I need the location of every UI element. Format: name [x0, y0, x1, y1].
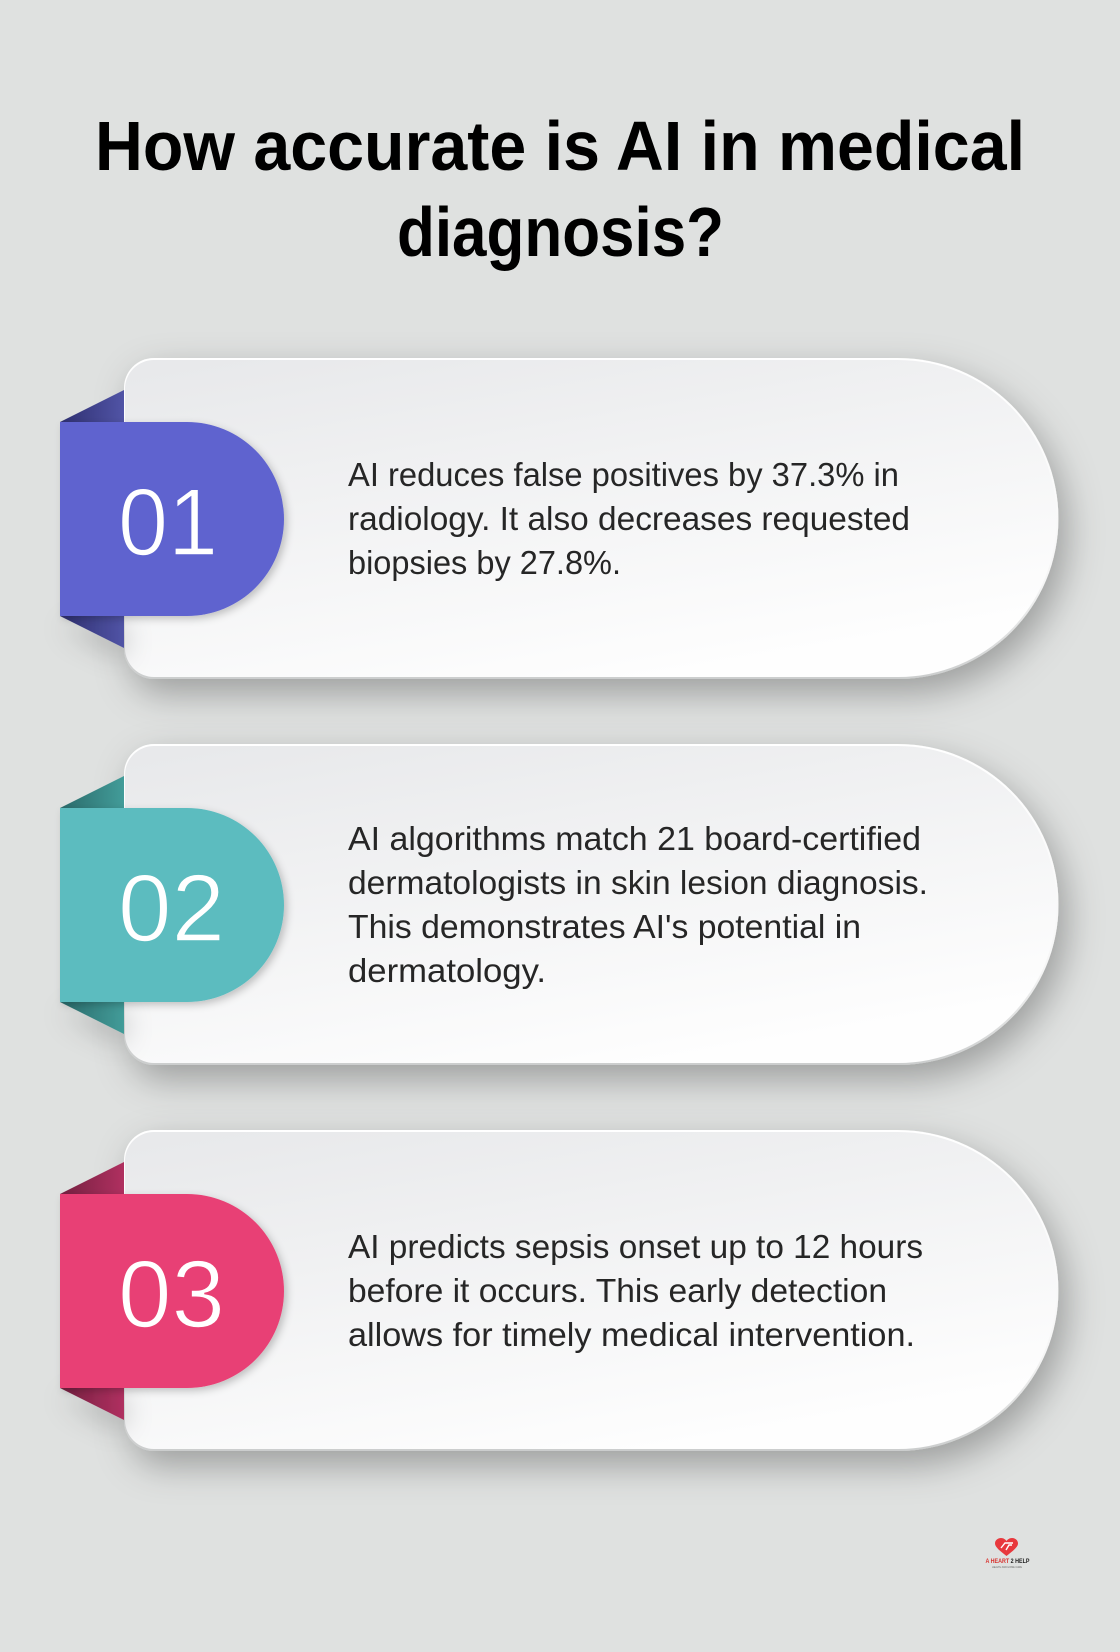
text: step 02: dermatology.	[348, 952, 546, 989]
text: step 03: before it occurs. This early detection	[348, 1272, 887, 1309]
title: diagnosis?	[397, 193, 724, 271]
ribbon fold: step 02 bottom	[60, 1002, 124, 1034]
ribbon fold: step 03 bottom	[60, 1388, 124, 1420]
ribbon fold: step 03 top	[60, 1162, 124, 1194]
text: step 02: AI algorithms match 21 board-certified	[348, 820, 921, 857]
card: step 03 face	[125, 1132, 1056, 1449]
title	[95, 107, 1025, 271]
text: step 03: AI predicts sepsis onset up to 12 hours	[348, 1228, 923, 1265]
text: step 02: This demonstrates AI's potential in	[348, 908, 861, 945]
badge: step 02	[60, 808, 284, 1002]
icon: hands in heart	[1001, 1543, 1013, 1550]
text: step 02: dermatologists in skin lesion diagnosis.	[348, 864, 928, 901]
title: How accurate is AI in medical	[95, 107, 1025, 185]
ribbon fold: step 01 bottom	[60, 616, 124, 648]
text: step 01: AI reduces false positives by 37.3% in	[348, 456, 899, 493]
number: 02: 02	[118, 855, 225, 962]
text: step 03: allows for timely medical intervention.	[348, 1316, 915, 1353]
badge: step 01	[60, 422, 284, 616]
text: step 01	[348, 456, 910, 581]
number: 03: 03	[118, 1241, 225, 1348]
logo tagline: HEALTH AND HOME CARE	[992, 1565, 1022, 1569]
card: step 01 face	[125, 360, 1056, 677]
panel: step 01	[60, 358, 1058, 679]
text: step 01: radiology. It also decreases requested	[348, 500, 910, 537]
text: step 03	[348, 1228, 923, 1353]
logo: A Heart 2 Help	[986, 1538, 1030, 1569]
card: step 02 background	[124, 744, 1058, 1065]
logo wordmark: A HEART 2 HELP	[986, 1558, 1030, 1565]
text: step 01: biopsies by 27.8%.	[348, 544, 621, 581]
icon: heart	[995, 1538, 1018, 1556]
card: step 02 face	[125, 746, 1056, 1063]
number: 01: 01	[118, 469, 218, 576]
badge: step 03	[60, 1194, 284, 1388]
ribbon fold: step 02 top	[60, 776, 124, 808]
panel: step 03	[60, 1130, 1058, 1451]
card: step 01 background	[124, 358, 1058, 679]
panel: step 02	[60, 744, 1058, 1065]
text: step 02	[348, 820, 928, 989]
card: step 03 background	[124, 1130, 1058, 1451]
ribbon fold: step 01 top	[60, 390, 124, 422]
